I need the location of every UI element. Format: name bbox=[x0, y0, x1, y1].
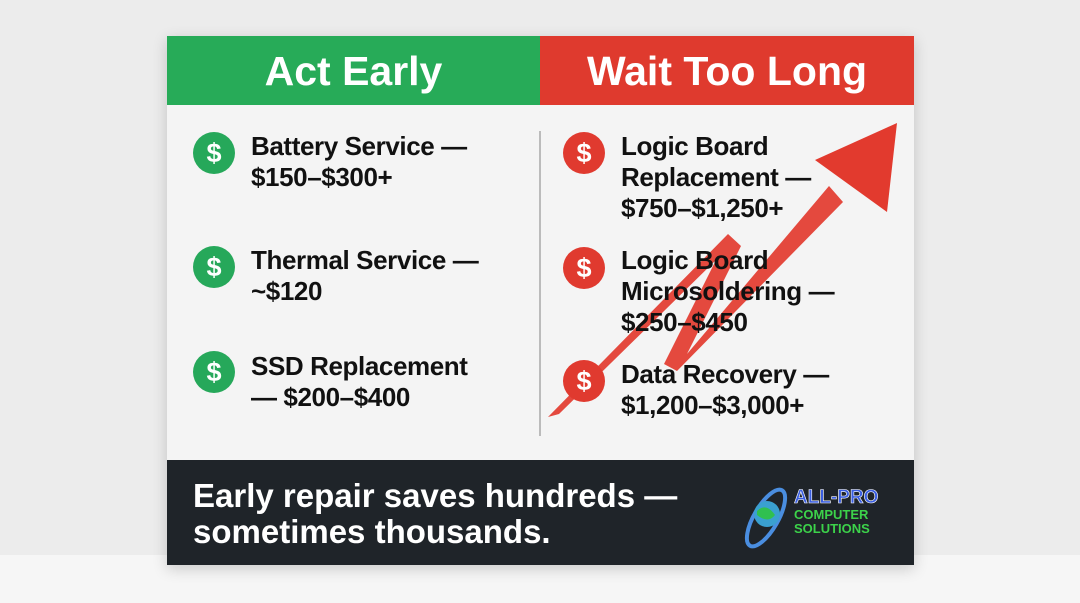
header: wait too long: Wait Too Long bbox=[587, 48, 867, 94]
card: $150–$300+ bbox=[251, 162, 392, 192]
footer text: Early repair saves hundreds — bbox=[193, 477, 677, 514]
card: Replacement — bbox=[621, 162, 811, 192]
card: Battery Service — bbox=[251, 131, 467, 161]
card: Logic Board bbox=[621, 245, 768, 275]
card: Microsoldering — bbox=[621, 276, 834, 306]
logo: COMPUTER bbox=[794, 507, 868, 522]
divider bbox=[539, 131, 541, 436]
card: $250–$450 bbox=[621, 307, 748, 337]
header: act early bbox=[167, 36, 540, 105]
card: Thermal Service — bbox=[251, 245, 478, 275]
footer text bbox=[193, 477, 678, 550]
card: $750–$1,250+ bbox=[621, 193, 783, 223]
card: $ bbox=[576, 366, 592, 396]
card: SSD Replacement bbox=[251, 351, 468, 381]
logo: ALL-PRO bbox=[794, 487, 878, 508]
card: Data Recovery — bbox=[621, 359, 829, 389]
footer bbox=[167, 460, 914, 565]
card: ~$120 bbox=[251, 276, 322, 306]
header: wait too long bbox=[540, 36, 914, 105]
left items bbox=[193, 132, 235, 174]
right items: $ bbox=[576, 138, 592, 168]
card: — $200–$400 bbox=[251, 382, 410, 412]
card: $ bbox=[206, 357, 222, 387]
card: Logic Board bbox=[621, 131, 768, 161]
card: $ bbox=[576, 253, 592, 283]
logo bbox=[744, 487, 878, 548]
card: $1,200–$3,000+ bbox=[621, 390, 804, 420]
footer text: sometimes thousands. bbox=[193, 513, 551, 550]
floor bbox=[0, 555, 1080, 603]
logo: SOLUTIONS bbox=[794, 521, 870, 536]
right items bbox=[563, 132, 605, 174]
header: act early: Act Early bbox=[265, 48, 442, 94]
card: $ bbox=[206, 252, 222, 282]
left items: $ bbox=[206, 138, 222, 168]
arrow bbox=[548, 123, 897, 417]
card bbox=[167, 36, 914, 565]
